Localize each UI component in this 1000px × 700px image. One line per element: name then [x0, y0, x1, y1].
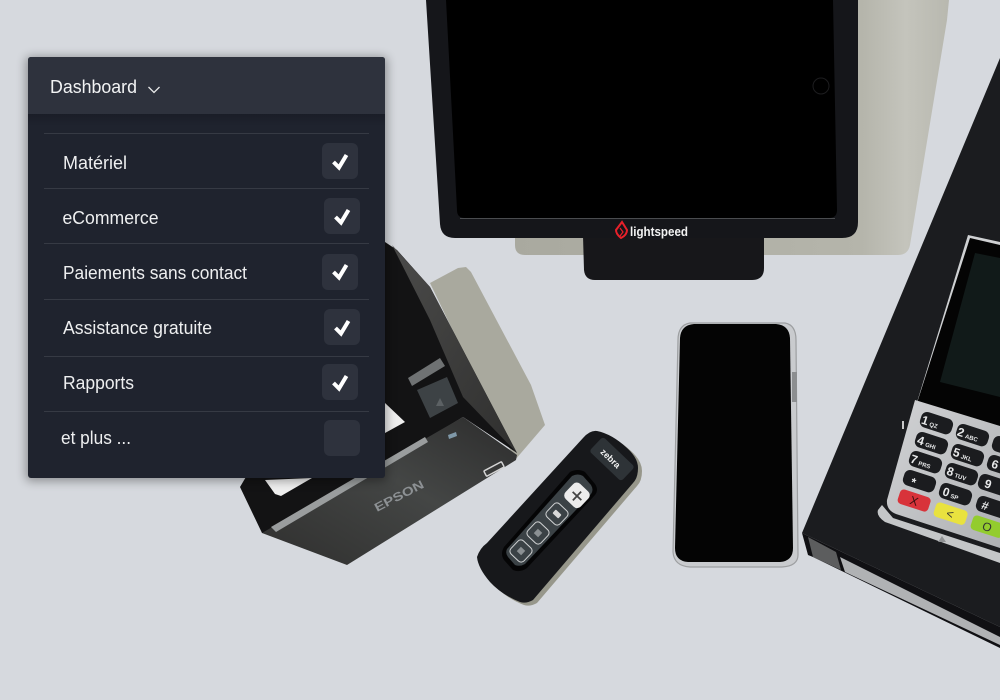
smartphone: [673, 323, 798, 567]
row: eCommerce: eCommerce: [62, 208, 158, 228]
row: Assistance gratuite: [63, 309, 360, 345]
row: et plus: et plus ...: [61, 428, 131, 448]
keypad: 8TUV: [945, 464, 969, 484]
lightspeed logo: [616, 222, 688, 239]
barcode scanner: [477, 431, 642, 606]
heading: Dashboard: [50, 76, 137, 97]
panel header: [28, 57, 385, 114]
keypad: 4GHI: [916, 433, 939, 452]
tablet POS on stand: [426, 0, 949, 280]
icon: chevron down: [148, 87, 160, 92]
row: Rapports: Rapports: [63, 373, 134, 393]
keypad: 9: [983, 476, 994, 492]
barcode scanner: zebra: [598, 447, 623, 471]
row: eCommerce: [62, 198, 360, 234]
keypad: 2ABC: [955, 425, 981, 445]
row: Matériel: [63, 143, 358, 179]
keypad: 7PRS: [909, 452, 933, 472]
row: Paiements sans contact: Paiements sans contact: [63, 263, 247, 283]
EPSON label: EPSON: [372, 477, 426, 515]
payment terminal: [878, 235, 1000, 563]
row: Assistance gratuite: Assistance gratuite: [63, 318, 212, 338]
panel shadow: [26, 57, 387, 481]
keypad: X: [908, 493, 920, 509]
keypad: <: [945, 506, 955, 522]
keypad: 5JKL: [951, 445, 975, 465]
receipt printer: [240, 242, 545, 565]
row: et plus: [61, 420, 360, 456]
keypad: 0SP: [941, 484, 961, 503]
row: Paiements sans contact: [63, 254, 358, 290]
keypad: *: [909, 475, 918, 490]
row: Matériel: Matériel: [63, 153, 127, 173]
keypad: O: [980, 519, 994, 535]
keypad: [897, 410, 1000, 539]
keypad: #: [980, 498, 991, 514]
cash drawer: [802, 58, 1000, 648]
keypad: 1QZ: [920, 413, 941, 431]
row: Rapports: [63, 364, 358, 400]
lightspeed logo: lightspeed: [630, 224, 688, 239]
panel: dashboard checklist: [28, 57, 385, 478]
